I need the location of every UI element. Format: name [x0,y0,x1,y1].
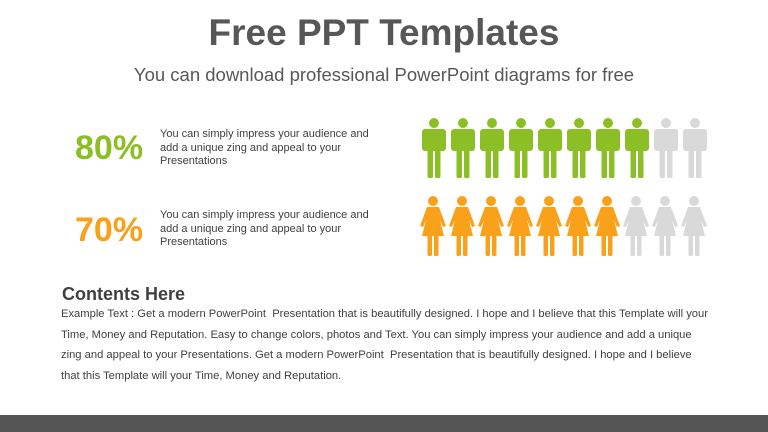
subtitle: You can download professional PowerPoint diagrams for free [134,64,634,85]
text block: body: that this Template will your Time, Money and Reputation. [61,370,341,382]
icons: men row [422,118,707,178]
stat: 80%: 80% [75,129,143,167]
text block: body: Time, Money and Reputation. Easy to change colors, photos and Text. You can simply impress your audience and add a unique [61,329,692,341]
text block: body [61,308,708,382]
stat: 70%: 70% [75,211,143,249]
text: 80% description: You can simply impress your audience and add a unique zing and appeal to your Presentations [160,128,369,167]
title: Free PPT Templates [209,12,559,53]
text block: body: zing and appeal to your Presentations. Get a modern PowerPoint Presentation that is beautifully designed. I hope and I believe [61,349,692,361]
icons: women row [420,196,707,256]
text: 70% description: You can simply impress your audience and add a unique zing and appeal to your Presentations [160,209,369,248]
text block: body: Example Text : Get a modern PowerPoint Presentation that is beautifully designed. I hope and I believe that this Template will your [61,308,708,320]
footer bar [0,415,768,432]
heading: contents: Contents Here [62,284,185,304]
